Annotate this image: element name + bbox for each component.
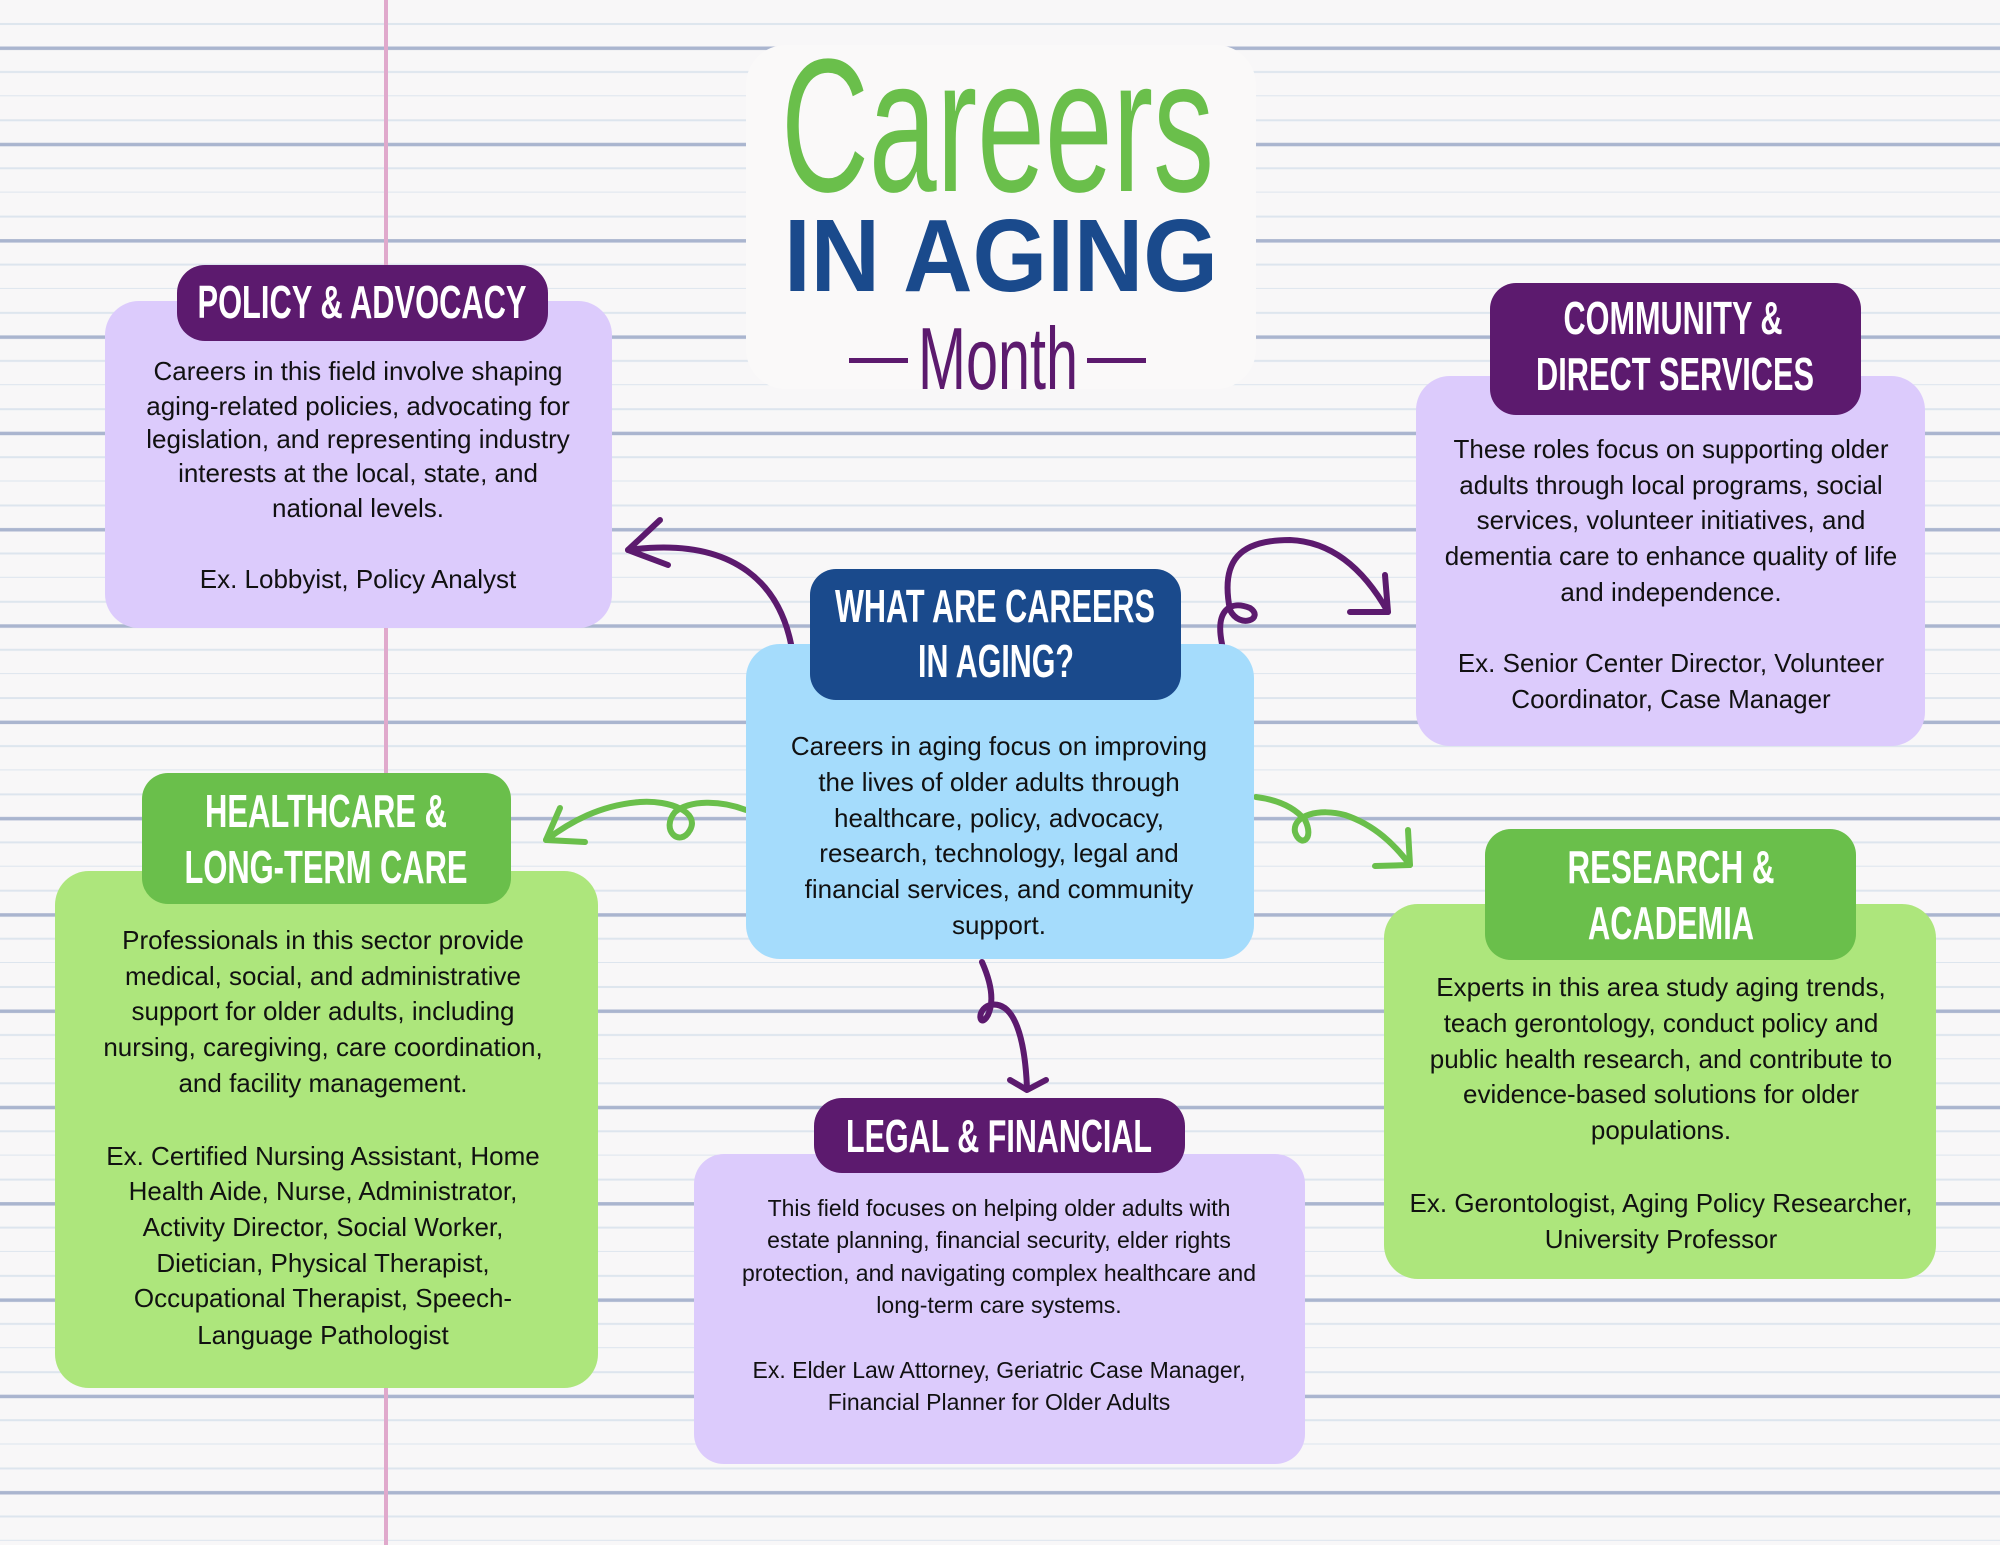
text: center description: research, technology, legal and <box>819 838 1179 868</box>
heading: what are careers in aging: WHAT ARE CAREERS <box>835 580 1155 632</box>
title block <box>746 20 1256 408</box>
text: healthcare description: and facility management. <box>178 1068 468 1098</box>
heading: community & direct services <box>1490 283 1861 415</box>
text: research description: evidence-based solutions for older <box>1463 1079 1859 1109</box>
arrow: center to community <box>1220 540 1388 644</box>
text: healthcare description: Dietician, Physical Therapist, <box>156 1248 490 1278</box>
text: center description: healthcare, policy, advocacy, <box>834 803 1164 833</box>
text: healthcare description: Health Aide, Nurse, Administrator, <box>129 1176 517 1206</box>
heading: research & academia: ACADEMIA <box>1588 897 1754 949</box>
heading: legal & financial <box>814 1098 1185 1173</box>
heading: policy & advocacy <box>177 265 548 341</box>
text: policy description <box>146 356 570 594</box>
heading: community & direct services: DIRECT SERVICES <box>1536 348 1814 400</box>
title: Careers: Careers <box>781 20 1214 232</box>
heading: what are careers in aging: IN AGING? <box>918 635 1074 687</box>
panel: healthcare & long-term care <box>55 773 598 1388</box>
heading: research & academia <box>1485 829 1856 960</box>
title: Month: Month <box>918 309 1078 408</box>
text: community description: and independence. <box>1560 577 1782 607</box>
text: research description: populations. <box>1591 1115 1731 1145</box>
text: center description: the lives of older adults through <box>818 767 1180 797</box>
text: research description <box>1410 972 1912 1254</box>
text: policy description: national levels. <box>272 493 444 523</box>
arrow: center to legal <box>980 962 1046 1090</box>
text: community description: Coordinator, Case Manager <box>1511 684 1831 714</box>
text: community description: adults through local programs, social <box>1459 470 1883 500</box>
text: legal description: long-term care systems. <box>876 1292 1122 1318</box>
panel: legal & financial <box>694 1098 1305 1464</box>
title: IN AGING: IN AGING <box>784 198 1218 313</box>
text: policy description: aging-related policies, advocating for <box>146 391 570 421</box>
text: legal description: Ex. Elder Law Attorney, Geriatric Case Manager, <box>752 1357 1246 1383</box>
text: healthcare description: Language Pathologist <box>197 1320 450 1350</box>
text: research description: Experts in this area study aging trends, <box>1436 972 1886 1002</box>
text: legal description: protection, and navigating complex healthcare and <box>742 1260 1256 1286</box>
text: policy description: interests at the local, state, and <box>178 458 538 488</box>
text: healthcare description: nursing, caregiving, care coordination, <box>103 1032 543 1062</box>
text: healthcare description: medical, social, and administrative <box>125 961 521 991</box>
text: policy description: Ex. Lobbyist, Policy Analyst <box>200 564 517 594</box>
text: policy description: legislation, and representing industry <box>146 424 570 454</box>
text: healthcare description: Activity Director, Social Worker, <box>143 1212 503 1242</box>
text: center description: support. <box>952 910 1046 940</box>
text: legal description <box>742 1195 1256 1415</box>
heading: healthcare: LONG-TERM CARE <box>184 841 468 893</box>
text: legal description: estate planning, financial security, elder rights <box>767 1227 1231 1253</box>
heading: legal & financial: LEGAL & FINANCIAL <box>846 1110 1152 1162</box>
panel: policy & advocacy <box>105 265 612 628</box>
text: community description: services, volunteer initiatives, and <box>1477 505 1865 535</box>
text: healthcare description: support for older adults, including <box>131 996 515 1026</box>
text: research description: Ex. Gerontologist, Aging Policy Researcher, <box>1410 1188 1912 1218</box>
text: center description: financial services, and community <box>805 874 1193 904</box>
text: community description: Ex. Senior Center Director, Volunteer <box>1458 648 1884 678</box>
panel: what are careers in aging <box>746 569 1254 959</box>
text: healthcare description <box>103 925 543 1350</box>
panel: community & direct services <box>1416 283 1925 746</box>
text: center description: Careers in aging focus on improving <box>791 731 1207 761</box>
heading: healthcare <box>142 773 511 904</box>
arrow: center to research <box>1256 797 1410 866</box>
text: healthcare description: Ex. Certified Nursing Assistant, Home <box>106 1141 540 1171</box>
arrows <box>546 520 1410 1090</box>
text: healthcare description: Occupational Therapist, Speech- <box>134 1283 512 1313</box>
arrow: center to healthcare <box>546 802 746 842</box>
text: policy description: Careers in this field involve shaping <box>154 356 562 386</box>
panel: research & academia <box>1384 829 1936 1279</box>
text: community description <box>1445 434 1897 714</box>
heading: policy & advocacy: POLICY & ADVOCACY <box>198 276 526 328</box>
heading: research & academia: RESEARCH & <box>1568 841 1774 893</box>
heading: community & direct services: COMMUNITY & <box>1564 292 1782 344</box>
text: healthcare description: Professionals in this sector provide <box>122 925 524 955</box>
heading: what are careers in aging <box>810 569 1181 700</box>
text: research description: public health research, and contribute to <box>1430 1044 1892 1074</box>
text: research description: University Professor <box>1545 1224 1778 1254</box>
text: center description <box>791 731 1207 940</box>
heading: healthcare: HEALTHCARE & <box>205 785 447 837</box>
text: community description: dementia care to enhance quality of life <box>1445 541 1897 571</box>
text: legal description: This field focuses on helping older adults with <box>768 1195 1230 1221</box>
text: legal description: Financial Planner for Older Adults <box>828 1389 1170 1415</box>
arrow: center to policy <box>628 520 791 644</box>
text: community description: These roles focus on supporting older <box>1453 434 1889 464</box>
text: research description: teach gerontology, conduct policy and <box>1444 1008 1878 1038</box>
